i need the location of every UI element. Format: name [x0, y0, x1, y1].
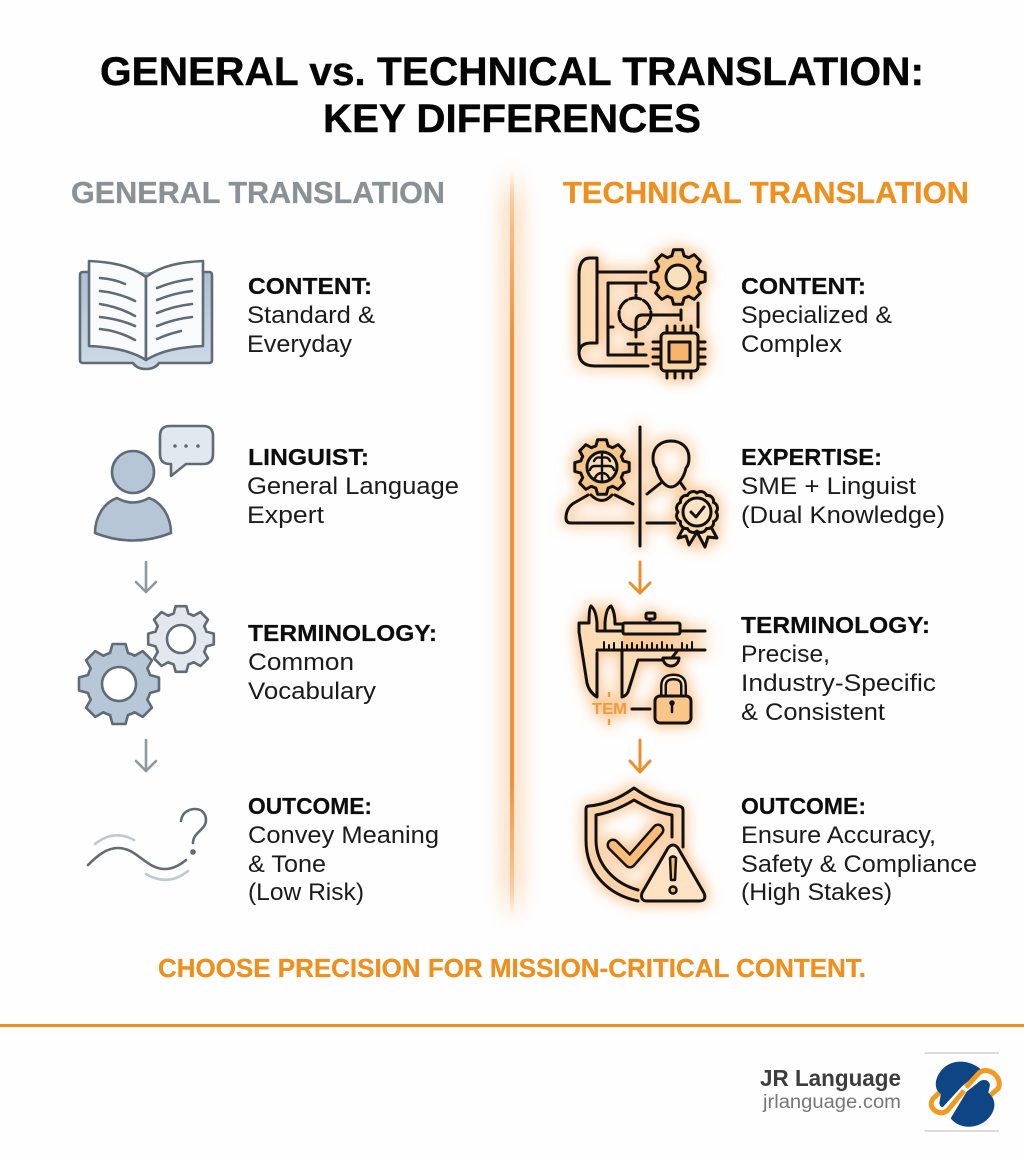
text: technical terminology — [741, 612, 936, 726]
text: technical expertise — [741, 444, 945, 529]
icon: caliper and lock: TEM — [592, 701, 627, 718]
text: general content: CONTENT: — [248, 273, 372, 299]
icon: gears — [79, 606, 214, 724]
text: general linguist: LINGUIST: — [248, 444, 369, 470]
title: KEY DIFFERENCES — [323, 97, 701, 141]
text: general terminology: Vocabulary — [248, 678, 376, 705]
brand text: jrlanguage.com — [762, 1092, 901, 1113]
arrow: general 1 — [136, 562, 156, 592]
text: technical expertise: (Dual Knowledge) — [741, 502, 945, 529]
text: technical terminology: Precise, — [741, 641, 830, 668]
icon: expert and linguist — [566, 427, 717, 547]
text: general outcome: Convey Meaning — [248, 822, 439, 849]
footer rule — [0, 1024, 1024, 1027]
text: technical expertise: SME + Linguist — [741, 473, 916, 500]
text: general terminology: Common — [248, 649, 354, 676]
text: technical content — [741, 273, 892, 358]
text: technical outcome: Ensure Accuracy, — [741, 822, 936, 849]
center divider — [498, 165, 526, 925]
text: technical outcome: OUTCOME: — [741, 793, 866, 819]
text: general content: Standard & — [247, 302, 375, 329]
icon: person with speech bubble — [95, 426, 213, 540]
text: technical content: CONTENT: — [741, 273, 866, 299]
text: technical terminology: TERMINOLOGY: — [741, 612, 930, 638]
text: technical outcome — [741, 793, 977, 906]
brand text — [760, 1065, 901, 1113]
title: GENERAL vs. TECHNICAL TRANSLATION: — [100, 50, 924, 94]
heading: general translation: GENERAL TRANSLATION — [71, 176, 445, 210]
text: general terminology — [248, 620, 437, 705]
text: general outcome: (Low Risk) — [248, 879, 364, 906]
text: technical content: Complex — [741, 331, 842, 358]
brand text: JR Language — [760, 1065, 901, 1091]
icon: wave and question mark — [88, 809, 206, 880]
tagline: CHOOSE PRECISION FOR MISSION-CRITICAL CONTENT. — [158, 955, 866, 983]
text: general outcome: OUTCOME: — [248, 793, 372, 819]
icon: shield and warning — [586, 788, 705, 901]
text: technical terminology: & Consistent — [741, 699, 885, 726]
logo — [925, 1053, 999, 1131]
icon: blueprint gear chip — [579, 250, 705, 378]
text: general linguist: General Language — [247, 473, 459, 500]
arrow: technical 1 — [630, 562, 650, 593]
text: general terminology: TERMINOLOGY: — [248, 620, 437, 646]
icon: open book — [80, 261, 212, 369]
text: technical outcome: Safety & Compliance — [741, 851, 977, 878]
text: technical terminology: Industry-Specific — [741, 670, 936, 697]
arrow: technical 2 — [630, 740, 650, 772]
text: general content: Everyday — [247, 331, 352, 358]
text: technical outcome: (High Stakes) — [741, 879, 892, 906]
text: general linguist — [247, 444, 459, 529]
title — [100, 50, 924, 141]
text: technical content: Specialized & — [741, 302, 892, 329]
arrow: general 2 — [136, 740, 156, 771]
text: general outcome — [248, 793, 439, 906]
text: technical expertise: EXPERTISE: — [741, 444, 882, 470]
heading: technical translation: TECHNICAL TRANSLATION — [563, 176, 969, 210]
text: general outcome: & Tone — [248, 851, 326, 878]
icon: caliper and lock — [579, 606, 705, 725]
text: general linguist: Expert — [247, 502, 324, 529]
text: general content — [247, 273, 375, 358]
